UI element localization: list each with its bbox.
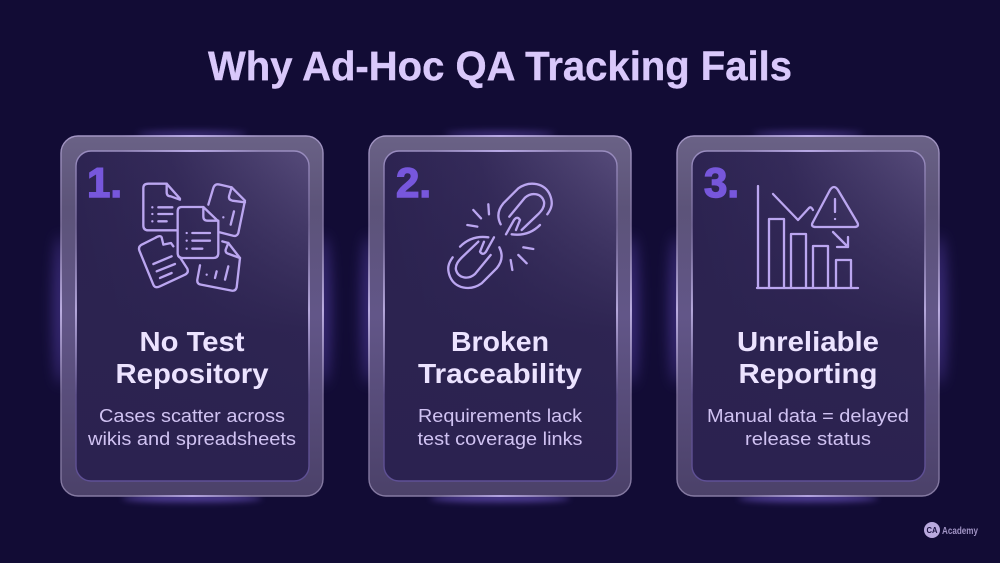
- heading line 2: Repository: [116, 358, 269, 389]
- heading line 2: Traceability: [418, 358, 582, 389]
- description: Manual data = delayed: [707, 405, 909, 426]
- logo: CA Academy: [924, 522, 978, 538]
- panel: no test repository: [54, 131, 330, 502]
- icon: scattered documents: [139, 184, 245, 291]
- heading line 2: Reporting: [738, 358, 878, 389]
- description: Requirements lack: [418, 405, 583, 426]
- description line 2: release status: [745, 428, 871, 449]
- logo: CA Academy: Academy: [942, 526, 978, 537]
- description: Cases scatter across: [99, 405, 285, 426]
- description line 2: test coverage links: [418, 428, 582, 449]
- description line 2: wikis and spreadsheets: [87, 428, 296, 449]
- panel: broken traceability: [362, 131, 638, 502]
- icon: broken chain link: [448, 184, 552, 288]
- heading: Broken: [451, 326, 549, 357]
- logo: CA Academy: CA: [926, 525, 938, 535]
- panel: unreliable reporting: [670, 131, 946, 502]
- heading: Unreliable: [737, 326, 879, 357]
- number 2: 2.: [396, 159, 431, 206]
- number 3: 3.: [704, 159, 739, 206]
- number 1: 1.: [87, 159, 122, 206]
- heading: No Test: [140, 326, 244, 357]
- title: Why Ad-Hoc QA Tracking Fails: [208, 43, 792, 89]
- icon: declining chart with warning: [757, 186, 858, 288]
